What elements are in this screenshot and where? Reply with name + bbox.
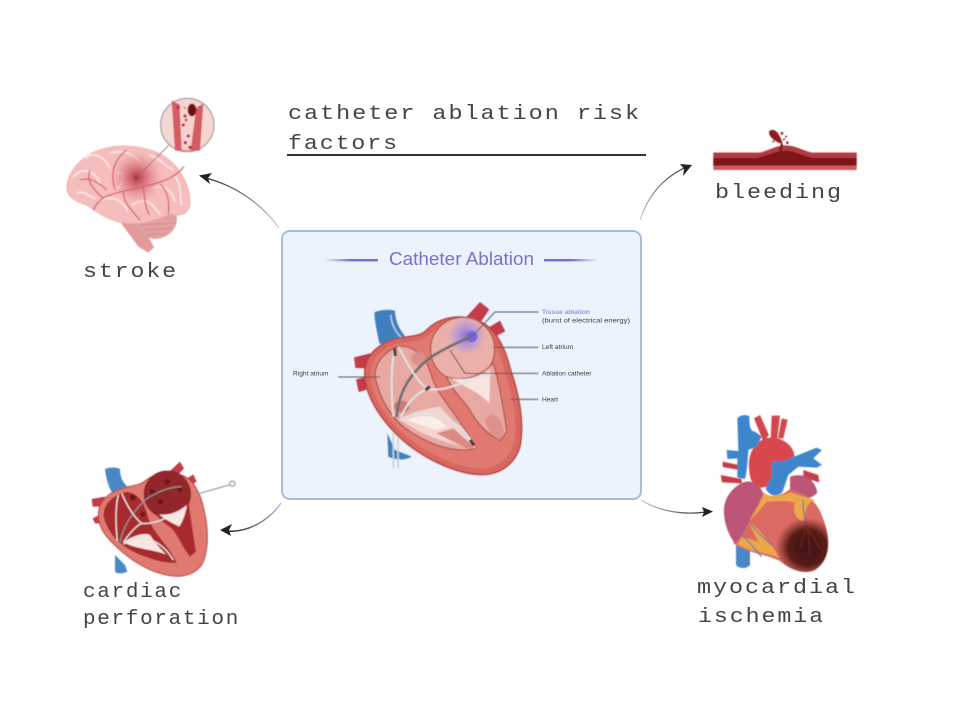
arrow: to myocardial ischemia (641, 500, 713, 517)
panel labels: Heart (542, 396, 558, 404)
icon: heart with ischemia (721, 415, 839, 578)
panel: catheter ablation (282, 231, 641, 499)
icon: perforated heart (92, 462, 235, 576)
title: catheter ablation risk (288, 103, 641, 126)
label: myocardial ischemia: ischemia (698, 606, 825, 629)
panel labels (293, 309, 630, 404)
panel labels: (burst of electrical energy) (542, 318, 630, 324)
icon: brain with stroke (67, 98, 214, 253)
label: myocardial ischemia: myocardial (697, 577, 857, 600)
label: stroke: stroke (83, 261, 178, 284)
infographic canvas (66, 97, 858, 628)
panel heading: Catheter Ablation (389, 249, 534, 269)
label: cardiac perforation: perforation (83, 608, 240, 631)
label: myocardial ischemia (697, 577, 857, 629)
arrow: to stroke (199, 173, 279, 228)
panel labels: Ablation catheter (542, 370, 592, 378)
arrow: to bleeding (640, 164, 692, 220)
arrow: to cardiac perforation (220, 503, 281, 536)
label: cardiac perforation: cardiac (83, 581, 183, 604)
label: cardiac perforation (83, 581, 240, 631)
panel labels: Left atrium (542, 344, 574, 351)
label: bleeding: bleeding (715, 182, 843, 205)
icon: bleeding vessel (713, 130, 857, 170)
title: factors (288, 133, 399, 156)
title (287, 103, 646, 156)
panel labels: Right atrium (293, 370, 329, 378)
chart: heart cross-section (338, 302, 538, 475)
panel labels: Tissue ablation (542, 309, 590, 316)
